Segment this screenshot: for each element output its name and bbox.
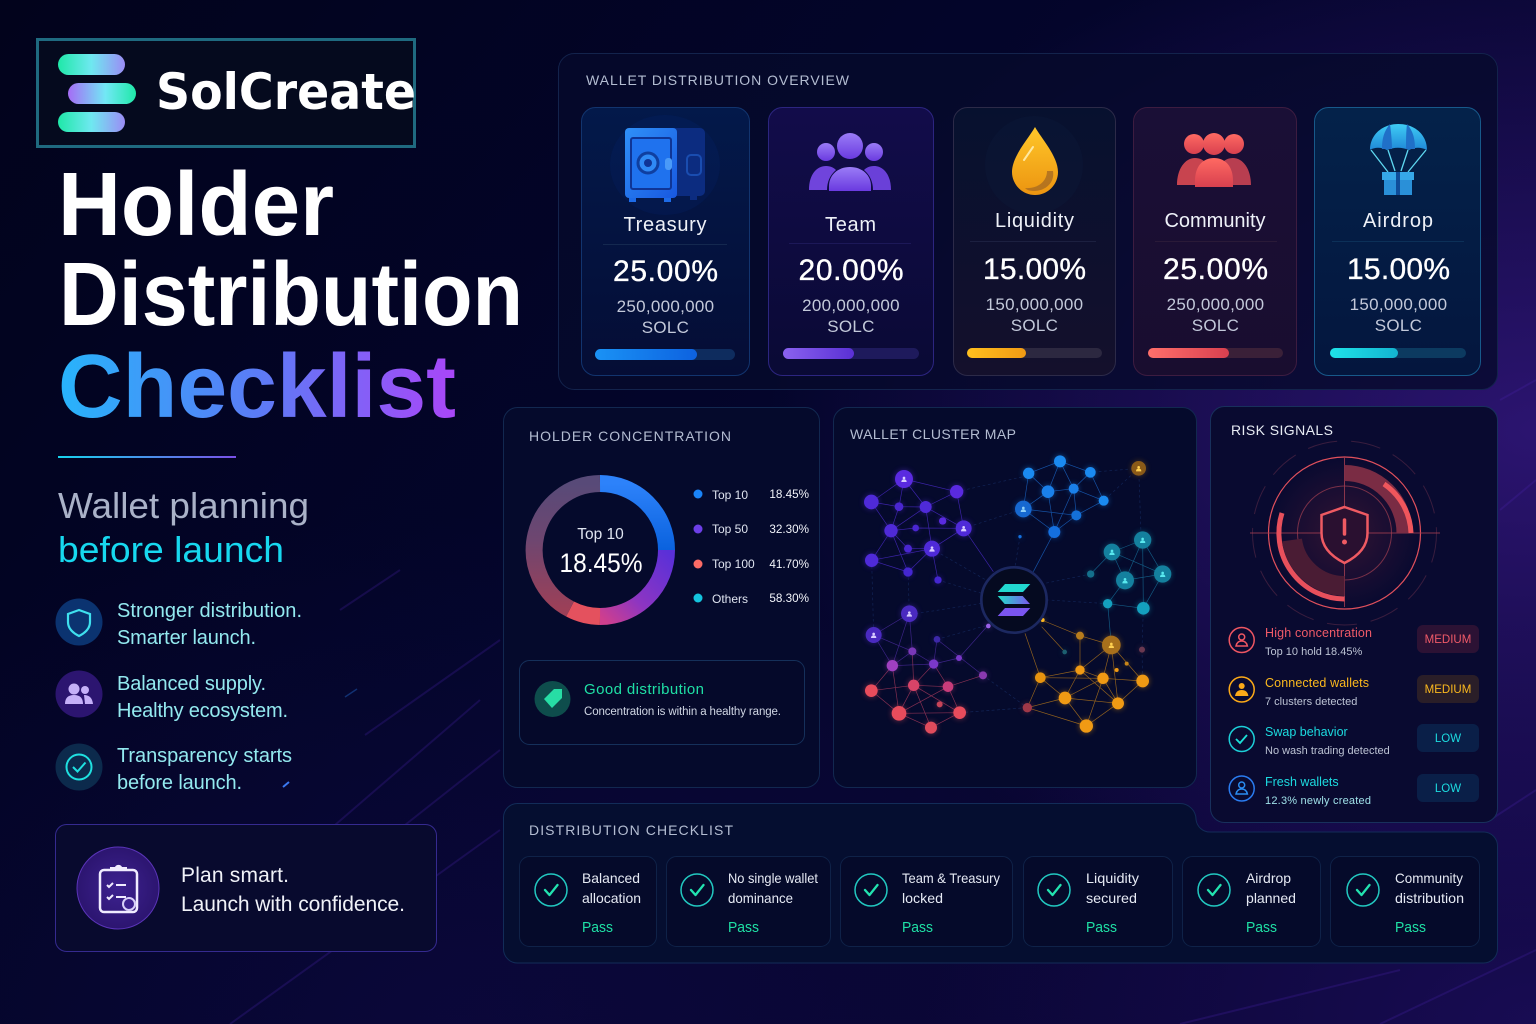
check item: no single wallet dominance [666, 856, 830, 946]
donut chart [534, 484, 666, 616]
logo: SolCreate [38, 40, 416, 146]
risk row: swap behavior: LOW [1435, 733, 1461, 745]
network graph [864, 455, 1171, 734]
subtitle: Wallet planning [58, 485, 309, 526]
risk row: fresh wallets [1229, 774, 1479, 807]
risk row: swap behavior: No wash trading detected [1265, 745, 1390, 757]
card: liquidity: Liquidity [995, 210, 1074, 232]
donut chart: 18.45% [560, 548, 642, 578]
icon: team [809, 133, 891, 191]
check item: liquidity secured: secured [1086, 890, 1137, 906]
card: community: 25.00% [1163, 253, 1268, 286]
heading: WALLET DISTRIBUTION OVERVIEW [586, 72, 850, 88]
heading: HOLDER CONCENTRATION [529, 428, 731, 444]
progress bar [1330, 348, 1466, 358]
risk row: connected wallets: MEDIUM [1425, 684, 1471, 696]
risk row: high concentration: Top 10 hold 18.45% [1265, 646, 1362, 658]
check item: team and treasury locked [840, 856, 1012, 946]
check item: balanced allocation: Pass [582, 920, 613, 936]
icon: logo bars [58, 54, 136, 132]
panel: holder concentration [504, 408, 820, 788]
benefit: balanced supply [56, 670, 288, 722]
card: liquidity: 15.00% [983, 253, 1086, 286]
divider [58, 456, 236, 458]
title: Holder [58, 155, 334, 255]
risk row: connected wallets [1229, 675, 1479, 708]
card: community: 250,000,000 [1167, 295, 1264, 314]
icon: safe [610, 115, 720, 215]
subtitle: before launch [58, 529, 284, 570]
risk row: high concentration: MEDIUM [1425, 634, 1471, 646]
icon: clipboard [77, 847, 159, 929]
risk row: high concentration: High concentration [1265, 626, 1372, 640]
progress bar [1148, 348, 1283, 358]
callout: plan smart: Plan smart. [181, 864, 289, 887]
check item: airdrop planned: Airdrop [1246, 870, 1291, 886]
risk row: connected wallets: 7 clusters detected [1265, 696, 1357, 708]
heading: RISK SIGNALS [1231, 422, 1333, 438]
check item: team and treasury locked: locked [902, 890, 943, 906]
legend: Top 100 [712, 557, 755, 571]
card: treasury: SOLC [642, 318, 689, 337]
legend: Top 10 [712, 488, 748, 502]
progress bar [595, 349, 735, 360]
check item: airdrop planned: Pass [1246, 920, 1277, 936]
benefit: transparency: Transparency starts [117, 745, 292, 767]
card: airdrop: 15.00% [1347, 253, 1450, 286]
benefit: stronger distribution [56, 598, 302, 649]
card: treasury [582, 108, 750, 376]
legend: Top 50 [712, 522, 748, 536]
benefit: stronger distribution: Smarter launch. [117, 627, 256, 649]
panel: risk signals [1210, 406, 1498, 822]
card: airdrop: Airdrop [1363, 210, 1433, 232]
check item: liquidity secured [1024, 856, 1172, 946]
callout: good distribution: Good distribution [584, 681, 704, 698]
card: team [768, 108, 934, 376]
benefit: balanced supply: Healthy ecosystem. [117, 700, 288, 722]
check item: team and treasury locked: Team & Treasury [902, 870, 1000, 886]
risk row: fresh wallets: 12.3% newly created [1265, 795, 1371, 807]
card: liquidity: 150,000,000 [986, 295, 1083, 314]
legend: 32.30% [769, 523, 809, 536]
legend: 41.70% [769, 558, 809, 571]
card: community: SOLC [1192, 316, 1239, 335]
heading: DISTRIBUTION CHECKLIST [529, 822, 733, 838]
card: team: 20.00% [798, 254, 904, 287]
benefit: transparency [56, 744, 292, 794]
title: Checklist [58, 337, 456, 437]
card: treasury: 250,000,000 [617, 297, 714, 316]
heading: WALLET CLUSTER MAP [850, 426, 1016, 442]
benefit: balanced supply: Balanced supply. [117, 673, 266, 695]
card: airdrop: 150,000,000 [1350, 295, 1447, 314]
card: community [1134, 108, 1296, 376]
check item: no single wallet dominance: dominance [728, 890, 793, 906]
check item: balanced allocation: Balanced [582, 870, 640, 886]
legend: 18.45% [769, 488, 809, 501]
check item: liquidity secured: Liquidity [1086, 870, 1139, 886]
legend [694, 488, 809, 606]
icon: parachute [1370, 124, 1427, 195]
callout: plan smart: Launch with confidence. [181, 893, 405, 916]
title: Distribution [59, 245, 523, 345]
check item: balanced allocation: allocation [582, 890, 641, 906]
check item: airdrop planned: planned [1246, 890, 1296, 906]
card: team: SOLC [827, 317, 875, 336]
check item: community distribution: Community [1395, 870, 1463, 886]
card: airdrop [1314, 108, 1480, 376]
hub: token logo [981, 567, 1047, 633]
panel: distribution checklist [504, 804, 1498, 963]
subtitle [58, 485, 309, 570]
icon: community [1177, 133, 1251, 187]
check item: community distribution: distribution [1395, 890, 1464, 906]
card: team: Team [825, 214, 876, 236]
panel: wallet distribution overview [558, 54, 1498, 390]
check item: community distribution: Pass [1395, 920, 1426, 936]
risk row: fresh wallets: LOW [1435, 783, 1461, 795]
benefit: stronger distribution: Stronger distribution. [117, 600, 302, 622]
panel: wallet cluster map [834, 408, 1196, 788]
callout: good distribution [520, 660, 804, 744]
callout: plan smart [56, 824, 436, 952]
card: airdrop: SOLC [1375, 316, 1422, 335]
check item: airdrop planned [1182, 856, 1320, 946]
progress bar [783, 348, 919, 359]
risk row: swap behavior [1229, 724, 1479, 757]
legend: 58.30% [769, 592, 809, 605]
progress bar [967, 348, 1102, 358]
title [58, 155, 523, 437]
donut chart: Top 10 [577, 526, 624, 543]
risk row: high concentration [1229, 625, 1479, 658]
radar shield [1250, 441, 1440, 625]
card: liquidity: SOLC [1011, 316, 1058, 335]
check item: no single wallet dominance: Pass [728, 920, 759, 936]
card: community: Community [1164, 210, 1266, 232]
risk row: swap behavior: Swap behavior [1265, 725, 1348, 739]
check item: liquidity secured: Pass [1086, 920, 1117, 936]
legend: Others [712, 592, 748, 606]
benefit: transparency: before launch. [117, 772, 242, 794]
callout: good distribution: Concentration is within a healthy range. [584, 706, 781, 718]
icon: drop [985, 116, 1083, 214]
logo wordmark: SolCreate [156, 63, 416, 121]
card: liquidity [954, 108, 1116, 376]
check item: no single wallet dominance: No single wallet [728, 870, 818, 886]
card: treasury: Treasury [624, 214, 706, 236]
risk row: fresh wallets: Fresh wallets [1265, 775, 1339, 789]
check item: team and treasury locked: Pass [902, 920, 933, 936]
check item: community distribution [1330, 856, 1480, 946]
card: treasury: 25.00% [613, 255, 718, 288]
check item: balanced allocation [520, 856, 656, 946]
card: team: 200,000,000 [802, 296, 900, 315]
risk row: connected wallets: Connected wallets [1265, 676, 1369, 690]
